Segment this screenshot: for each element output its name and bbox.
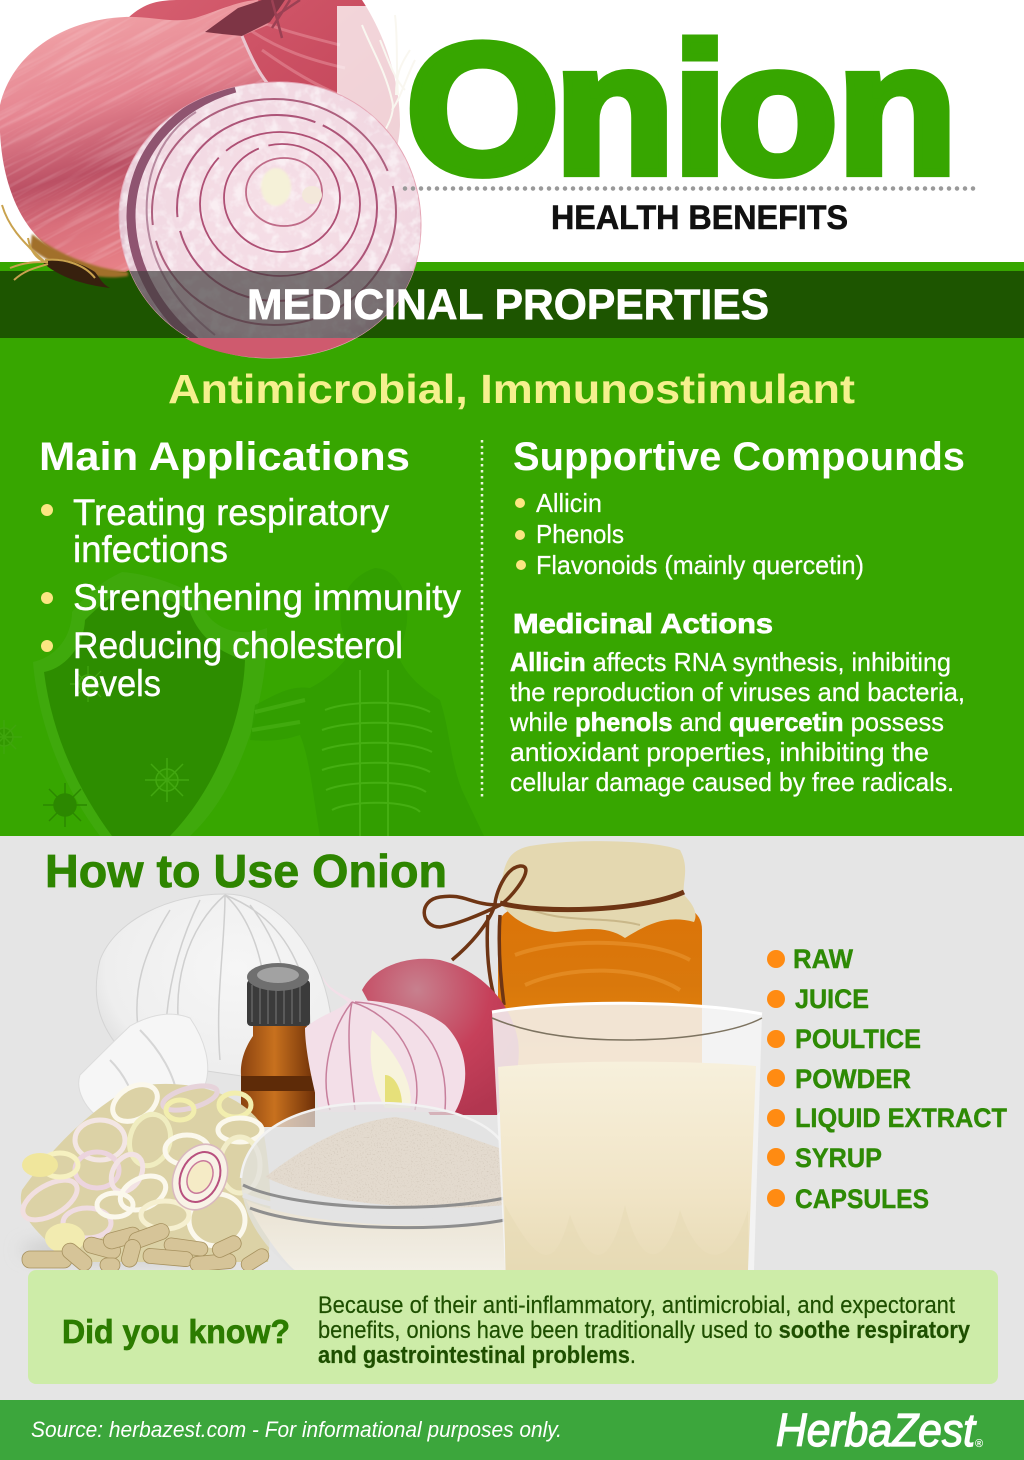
heading: supportive compounds: Supportive Compounds — [513, 435, 965, 479]
virus: shield top — [70, 666, 106, 702]
panel: main applications — [39, 435, 461, 704]
icon: glass of milk juice — [492, 1003, 762, 1270]
watermark: human body — [250, 568, 484, 836]
icon: white root strands — [362, 15, 415, 130]
list: forms of use: CAPSULES — [795, 1184, 929, 1214]
icon: glass bowl of powder — [241, 1103, 505, 1270]
list: forms of use: POWDER — [795, 1064, 911, 1094]
heading: medicinal properties: MEDICINAL PROPERTIES — [247, 281, 769, 329]
icon: sliced onion heap — [17, 1077, 270, 1264]
heading: how to use onion: How to Use Onion — [45, 845, 447, 897]
registered mark: ® — [975, 1438, 983, 1450]
heading: main applications: Main Applications — [39, 435, 410, 479]
title: Onion — [406, 5, 957, 213]
vertical dotted divider — [481, 440, 483, 800]
bullet list: compounds: Phenols — [536, 519, 624, 549]
panel: medicinal properties background — [0, 262, 1024, 836]
callout: did you know — [28, 1270, 998, 1384]
icon: back onion — [128, 0, 400, 240]
bullet list: compounds: Allicin — [536, 488, 602, 518]
list: forms of use — [767, 944, 1007, 1214]
icon: whole red onion — [0, 0, 300, 279]
text block: medicinal actions: the reproduction of viruses and bacteria, — [510, 677, 965, 707]
icon: essential oil bottle — [241, 963, 315, 1127]
bullet list: applications — [41, 492, 461, 704]
icon: cut red onion half — [305, 959, 519, 1115]
callout heading: Did you know? — [62, 1313, 290, 1350]
callout text: Because of their anti-inflammatory, antimicrobial, and expectorant — [318, 1292, 955, 1319]
virus: shield lower left — [43, 783, 87, 827]
bullet list: applications: Strengthening immunity — [73, 577, 461, 618]
bullet list: compounds: Flavonoids (mainly quercetin) — [536, 550, 864, 580]
virus: left edge — [0, 720, 22, 754]
bullet list: applications: levels — [73, 663, 161, 704]
icon: cut red onion — [119, 82, 422, 359]
bullet list: applications: infections — [73, 529, 228, 570]
list: forms of use: JUICE — [795, 984, 869, 1014]
dotted divider — [405, 186, 975, 191]
watermark: shield — [0, 572, 267, 836]
list: forms of use: LIQUID EXTRACT — [795, 1103, 1007, 1133]
virus: shield centre — [145, 758, 189, 802]
bullet list: compounds — [515, 488, 864, 580]
list: forms of use: RAW — [793, 944, 853, 974]
icon: onion base roots — [2, 205, 110, 288]
list: forms of use: POULTICE — [795, 1024, 921, 1054]
icon: capsules — [22, 1221, 271, 1274]
subtitle: HEALTH BENEFITS — [551, 199, 848, 237]
text block: medicinal actions: while phenols and quercetin possess — [509, 707, 944, 737]
bullet list: applications: Reducing cholesterol — [73, 625, 403, 666]
callout text: and gastrointestinal problems. — [318, 1342, 636, 1369]
panel: footer — [0, 1400, 1024, 1460]
overlay: white fade panel — [337, 6, 420, 246]
icon: jar of syrup — [424, 841, 702, 1065]
callout text: benefits, onions have been traditionally used to soothe respiratory — [318, 1317, 971, 1344]
icon: poultice bundles — [79, 894, 331, 1122]
text block: medicinal actions — [509, 647, 965, 797]
text block: medicinal actions: antioxidant properties, inhibiting the — [510, 737, 929, 767]
list: forms of use: SYRUP — [795, 1143, 882, 1173]
subheading: properties: Antimicrobial, Immunostimulant — [168, 366, 855, 412]
slice: large ring — [162, 1135, 238, 1219]
overlay: dark band over onion — [119, 271, 422, 338]
panel: supportive compounds — [509, 435, 965, 797]
callout text — [318, 1292, 971, 1369]
panel: how to use background — [0, 836, 1024, 1400]
logo: HerbaZest: HerbaZest — [776, 1404, 977, 1456]
text block: medicinal actions: Allicin affects RNA synthesis, inhibiting — [510, 647, 951, 677]
heading: medicinal actions: Medicinal Actions — [513, 608, 773, 639]
source note: Source: herbazest.com - For informational purposes only. — [31, 1417, 562, 1442]
bullet list: applications: Treating respiratory — [73, 492, 389, 533]
text block: medicinal actions: cellular damage caused by free radicals. — [510, 767, 954, 797]
